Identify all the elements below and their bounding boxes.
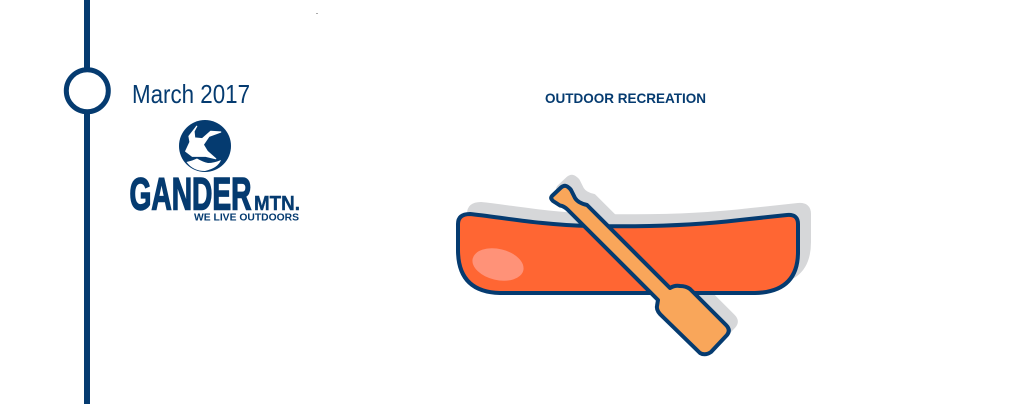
paddle bbox=[551, 186, 729, 354]
category heading: OUTDOOR RECREATION bbox=[545, 90, 706, 106]
tagline: WE LIVE OUTDOORS bbox=[194, 212, 299, 224]
speck bbox=[316, 13, 318, 14]
wordmark: GANDER: GANDER bbox=[130, 168, 252, 220]
canoe hull bbox=[458, 214, 798, 293]
timeline bbox=[66, 0, 108, 404]
date heading: March 2017 bbox=[132, 79, 250, 109]
wordmark: MTN: MTN. bbox=[254, 192, 300, 215]
icon: goose emblem bbox=[179, 120, 231, 172]
hull highlight bbox=[469, 244, 527, 285]
paddle shadow bbox=[558, 177, 736, 345]
logo: Gander Mtn bbox=[130, 120, 300, 224]
canoe shadow bbox=[469, 204, 809, 283]
illustration: canoe and paddle bbox=[458, 177, 809, 354]
